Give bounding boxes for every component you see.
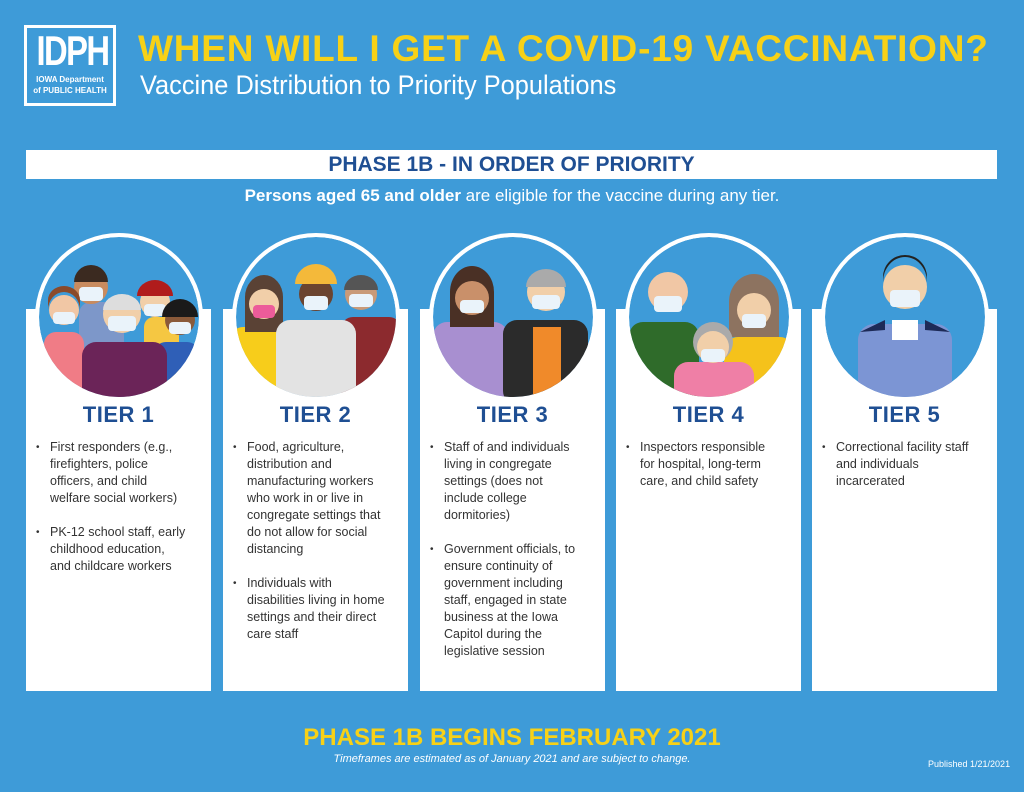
panel: tier 5	[812, 233, 997, 691]
text: tier 1 bullets: First responders (e.g., firefighters, police officers, and child welfare social workers)	[50, 440, 177, 505]
title: WHEN WILL I GET A COVID-19 VACCINATION?	[138, 28, 989, 69]
logo: IDPH	[36, 28, 109, 74]
panel: tier 4	[616, 233, 801, 691]
text: tier 1 bullets: PK-12 school staff, early childhood education, and childcare workers	[50, 525, 185, 573]
footer heading: PHASE 1B BEGINS FEBRUARY 2021	[303, 724, 721, 751]
footer note: Timeframes are estimated as of January 2021 and are subject to change.	[334, 753, 690, 765]
heading: tier 1: TIER 1	[83, 402, 154, 427]
icon: tier 1 people	[35, 233, 203, 397]
logo: IOWA Department	[36, 75, 104, 84]
eligibility note: Persons aged 65 and older are eligible for the vaccine during any tier.	[245, 186, 779, 205]
subtitle: Vaccine Distribution to Priority Populations	[140, 70, 616, 100]
icon: tier 5 officer	[821, 233, 989, 397]
text: tier 2 bullets: Individuals with disabilities living in home settings and their direct care staff	[247, 576, 385, 641]
heading: tier 5: TIER 5	[869, 402, 940, 427]
panel: tier 2	[223, 233, 408, 691]
heading: tier 4: TIER 4	[673, 402, 744, 427]
published date: Published 1/21/2021	[928, 759, 1010, 769]
text: tier 3 bullets	[430, 440, 575, 658]
text: tier 2 bullets	[233, 440, 385, 641]
text: tier 2 bullets: Food, agriculture, distribution and manufacturing workers who work in or live in congregate settings that do not allow for social distancing	[247, 440, 380, 556]
logo	[24, 25, 116, 106]
panel: tier 1	[26, 233, 211, 691]
heading: tier 3: TIER 3	[477, 402, 548, 427]
banner	[26, 150, 997, 179]
text: tier 3 bullets: Staff of and individuals living in congregate settings (does not include college dormitories)	[444, 440, 570, 522]
logo: of PUBLIC HEALTH	[33, 86, 107, 95]
text: tier 4 bullets: Inspectors responsible for hospital, long-term care, and child safety	[640, 440, 765, 488]
text: tier 5 bullets: Correctional facility staff and individuals incarcerated	[836, 440, 968, 488]
icon: tier 4 people	[625, 233, 793, 397]
heading: tier 2: TIER 2	[280, 402, 351, 427]
icon: tier 3 people	[429, 233, 597, 397]
text: tier 3 bullets: Government officials, to ensure continuity of government including staff, engaged in state business at the Iowa Capitol during the legislative session	[444, 542, 575, 658]
panel: tier 3	[420, 233, 605, 691]
banner: PHASE 1B - IN ORDER OF PRIORITY	[328, 153, 695, 176]
icon: tier 2 people	[232, 233, 400, 397]
text: tier 1 bullets	[36, 440, 186, 573]
